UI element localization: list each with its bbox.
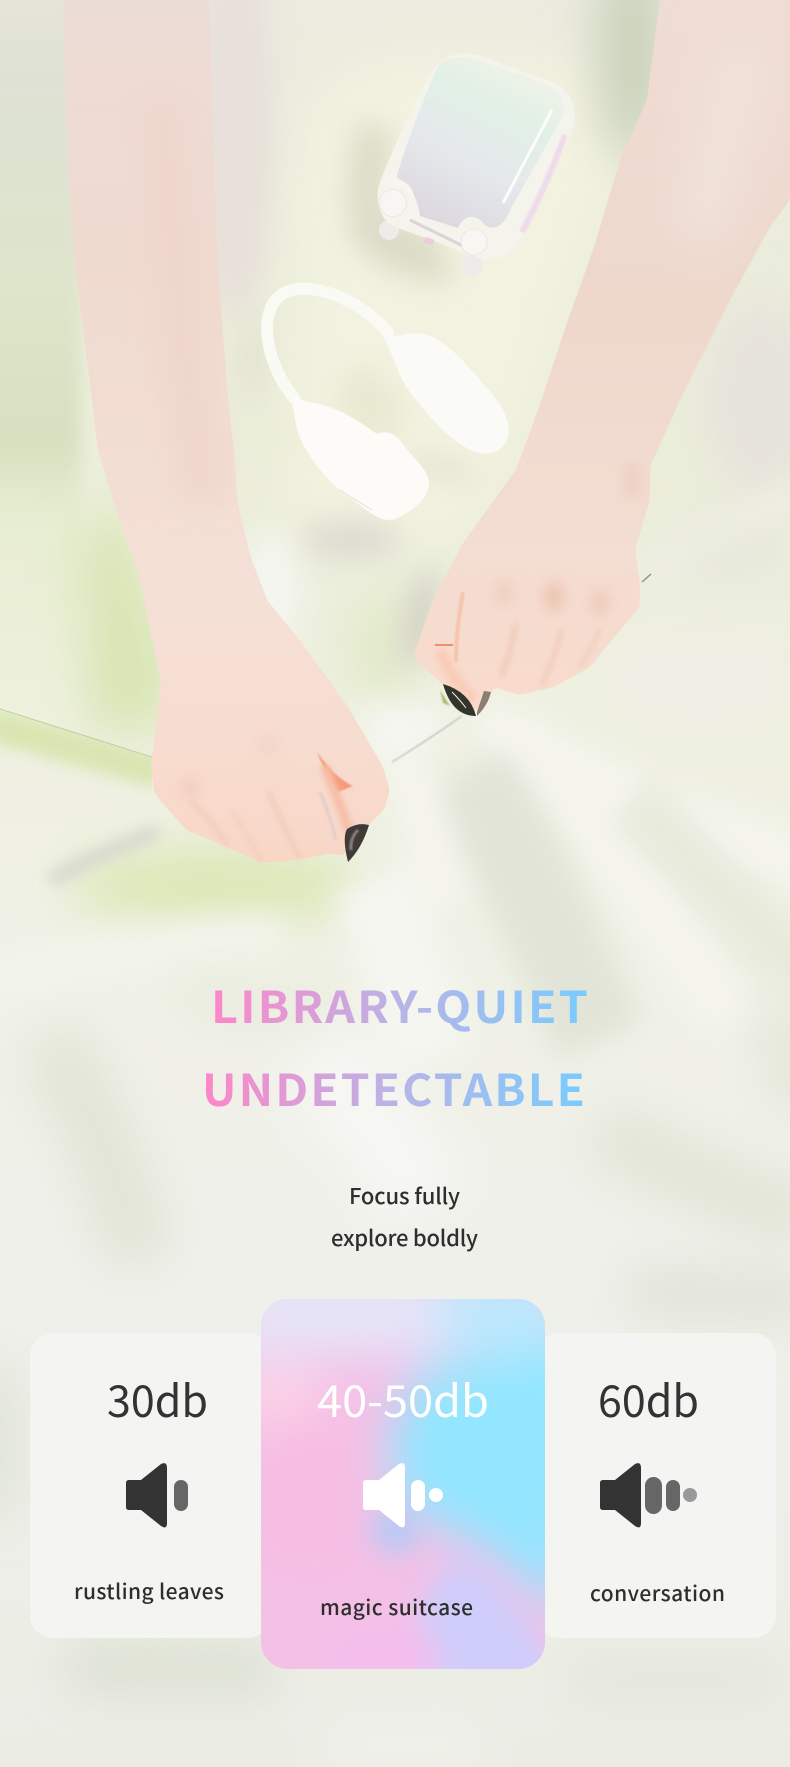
sheet: crease line near right nail [392,716,462,762]
sheet: crease line [0,709,152,757]
right hand nail [443,684,476,716]
sheet: olive shadow beside right arm [598,0,666,160]
30db value: 30db [107,1366,208,1430]
subtitle [331,1179,478,1253]
gradient mesh of the card [261,1299,545,1626]
left hand nail [345,824,369,862]
label: magic suitcase: magic suitcase [320,1592,473,1622]
sheet: lower soft folds behind text and cards [0,1028,790,1699]
suitcase body [378,54,575,260]
60db value: 60db [598,1366,699,1430]
product: white app-controlled vibrating egg [267,289,509,520]
sheet: green near forearm and below fist [65,500,408,923]
suitcase wheels [380,183,487,255]
sheet: pale pink fold beside left arm [210,0,268,306]
sheet: gathered folds between the hands [250,532,442,766]
subtitle line 2: explore boldly [331,1221,478,1253]
right hand: knuckles and finger gaps [435,580,609,700]
label: conversation: conversation [590,1578,725,1608]
sheet: grey streak left of the fist [50,832,158,880]
left hand: finger gaps and thumb [181,733,353,862]
title [202,972,590,1119]
egg body [382,330,509,454]
icon: speaker with three sound bars [600,1463,697,1527]
icon: speaker with one sound bar [126,1463,188,1527]
sheet: left column tint [0,16,83,556]
sheet: right side folds [669,322,790,690]
connecting cable [267,289,388,398]
panel: 30db card [30,1333,270,1638]
product: iridescent suitcase case [378,54,575,277]
right arm: lighter outer side and wrist mark [623,40,745,500]
panel: 40-50db highlighted card [261,1299,545,1669]
left arm: soft shading [160,100,205,500]
remote control body [286,388,429,520]
photo: left arm and fist [63,0,390,863]
photo: right arm and fist [413,0,790,716]
panel: 60db card [536,1333,776,1638]
suitcase lower feet [379,220,483,277]
suitcase bottom trim [410,220,463,246]
40-50db value: 40-50db [317,1366,489,1430]
sheet: shadows around the products [306,122,453,562]
title line 1: LIBRARY-QUIET [211,972,590,1036]
title line 2: UNDETECTABLE [202,1055,587,1119]
sheet: cream centre [300,50,615,530]
sheet fold next to right nail [477,691,491,716]
subtitle line 1: Focus fully [349,1179,460,1211]
suitcase highlight [503,110,552,203]
suitcase iridescent shell [397,57,563,228]
sheet: folds radiating from the fists [109,708,790,1050]
icon: white speaker with sound bar and dot [363,1463,443,1527]
sheet: green wedge under the crease [0,724,160,772]
label: rustling leaves: rustling leaves [74,1576,224,1606]
